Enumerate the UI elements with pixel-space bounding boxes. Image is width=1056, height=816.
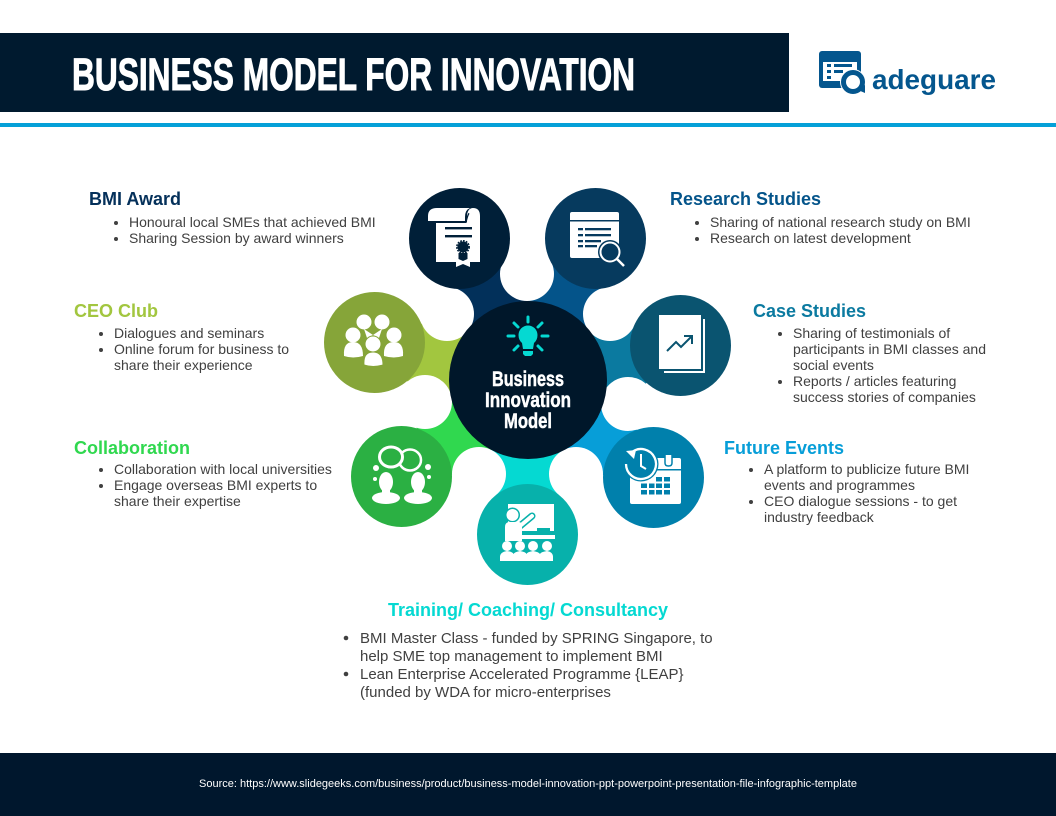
- text block: Future Events: [724, 438, 969, 525]
- logo: adeguare: [819, 51, 996, 95]
- text block: Case Studies: Sharing of testimonials of: [793, 325, 950, 341]
- text block: Research Studies: [670, 189, 971, 246]
- text block: Training/ Coaching/ Consultancy: Training/ Coaching/ Consultancy: [388, 600, 668, 620]
- text block: Collaboration: [74, 438, 332, 509]
- connector: Future Events: [528, 380, 653, 477]
- text block: BMI Award: Honoural local SMEs that achieved BMI: [129, 214, 376, 230]
- text block: Training/ Coaching/ Consultancy: Lean Enterprise Accelerated Programme {LEAP}: [360, 666, 684, 683]
- connector: Case Studies: [528, 314, 680, 404]
- icon: Collaboration people: [351, 426, 452, 527]
- icon: light bulb: [508, 317, 548, 356]
- text block: Training/ Coaching/ Consultancy: [344, 600, 713, 701]
- text block: Case Studies: [753, 301, 986, 405]
- centre circle: Business Innovation Model: [449, 301, 607, 459]
- centre circle: Business Innovation Model: Model: [504, 410, 552, 433]
- text block: CEO Club: CEO Club: [74, 301, 158, 321]
- text block: Training/ Coaching/ Consultancy: help SME top management to implement BMI: [360, 648, 663, 665]
- text block: Future Events: industry feedback: [764, 509, 875, 525]
- text block: Research Studies: Research Studies: [670, 189, 821, 209]
- logo: adeguare: adeguare: [872, 64, 996, 95]
- text block: Research Studies: Sharing of national research study on BMI: [710, 214, 971, 230]
- text block: Future Events: CEO dialogue sessions - to get: [764, 493, 957, 509]
- text block: BMI Award: Sharing Session by award winners: [129, 230, 344, 246]
- text block: Case Studies: participants in BMI classes and: [793, 341, 986, 357]
- footer: source: Source: https://www.slidegeeks.com/business/product/business-model-innovation-ppt-powerpoint-presentation-file-infographic-template: [199, 778, 857, 790]
- centre circle: Business Innovation Model: Business: [492, 368, 564, 391]
- title banner: [0, 33, 789, 112]
- text block: Training/ Coaching/ Consultancy: (funded by WDA for micro-enterprises: [360, 684, 611, 701]
- connector: CEO Club: [374, 314, 528, 402]
- text block: Future Events: Future Events: [724, 438, 844, 458]
- text block: CEO Club: [74, 301, 289, 373]
- text block: Future Events: events and programmes: [764, 477, 915, 493]
- icon: Research Studies report: [545, 188, 646, 289]
- connector: Training: [479, 380, 576, 534]
- icon: BMI Award certificate: [409, 188, 510, 289]
- footer: source: [0, 753, 1056, 816]
- icon: Future Events calendar: [603, 427, 704, 528]
- icon: CEO Club group: [324, 292, 425, 393]
- text block: Collaboration: share their expertise: [114, 493, 241, 509]
- text block: Collaboration: Collaboration: [74, 438, 190, 458]
- hub-and-spoke diagram: [324, 188, 731, 585]
- text block: Collaboration: Collaboration with local universities: [114, 461, 332, 477]
- text block: Case Studies: Case Studies: [753, 301, 866, 321]
- connector: Collaboration: [401, 380, 528, 476]
- connector: BMI Award: [447, 238, 528, 380]
- connector: Research Studies: [527, 238, 610, 380]
- icon: Training classroom: [477, 484, 578, 585]
- centre circle: Business Innovation Model: Innovation: [485, 389, 571, 412]
- text block: Case Studies: social events: [793, 357, 874, 373]
- text block: CEO Club: share their experience: [114, 357, 253, 373]
- title banner: BUSINESS MODEL FOR INNOVATION: [72, 49, 635, 100]
- text block: CEO Club: Online forum for business to: [114, 341, 289, 357]
- text block: BMI Award: BMI Award: [89, 189, 181, 209]
- text block: Collaboration: Engage overseas BMI experts to: [114, 477, 317, 493]
- icon: Case Studies document chart: [630, 295, 731, 396]
- text block: Training/ Coaching/ Consultancy: BMI Master Class - funded by SPRING Singapore, to: [360, 630, 713, 647]
- text block: Research Studies: Research on latest development: [710, 230, 911, 246]
- text block: Case Studies: success stories of companies: [793, 389, 976, 405]
- text block: CEO Club: Dialogues and seminars: [114, 325, 264, 341]
- text block: Future Events: A platform to publicize future BMI: [764, 461, 969, 477]
- text block: Case Studies: Reports / articles featuring: [793, 373, 956, 389]
- text block: BMI Award: [89, 189, 376, 246]
